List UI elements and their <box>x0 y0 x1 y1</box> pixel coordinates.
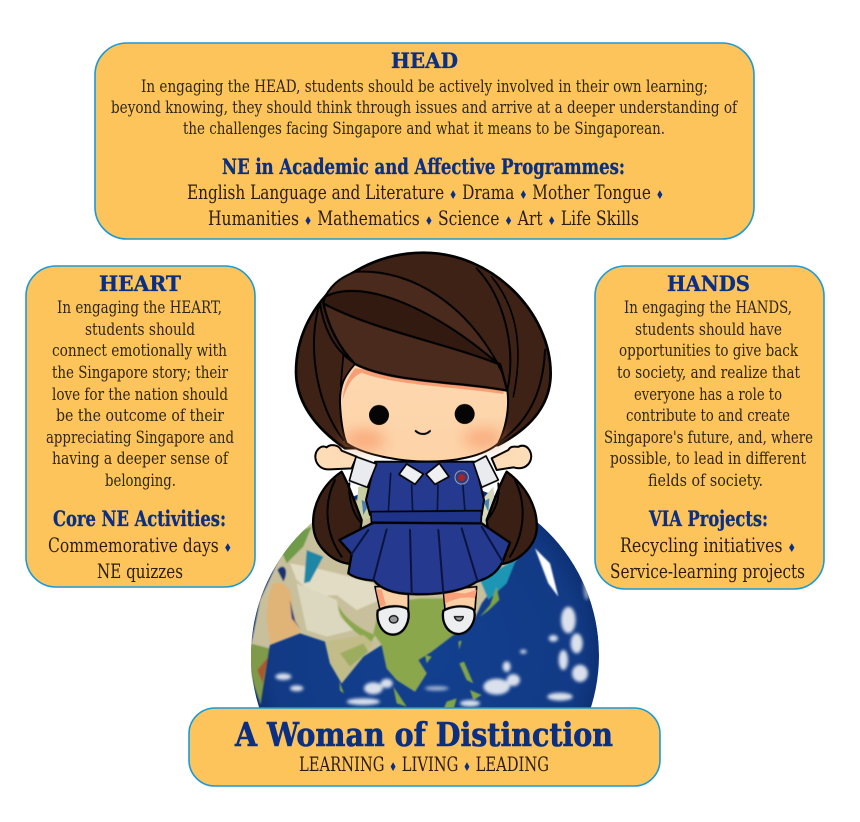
subheading: academic programmes: NE in Academic and Affective Programmes: <box>222 154 625 179</box>
arm right <box>492 446 531 470</box>
text block: hands description: everyone has a role to <box>634 385 782 404</box>
subtitle: LEARNING ♦ LIVING ♦ LEADING <box>299 752 549 776</box>
text block: hands description: students should have <box>635 320 782 339</box>
text block: heart description: having a deeper sense of <box>52 449 229 468</box>
text block: hands description: Singapore's future, and, where <box>604 428 813 447</box>
text block: heart description: love for the nation should <box>52 385 228 404</box>
panel: title banner <box>189 708 660 786</box>
subheading: core activities: Core NE Activities: <box>53 506 226 531</box>
pigtail left <box>313 472 362 564</box>
text block: programme list: Humanities ♦ Mathematics ♦ Science ♦ Art ♦ Life Skills <box>208 206 639 230</box>
heading: head: HEAD <box>391 48 458 73</box>
sleeves <box>349 456 498 487</box>
arm left <box>315 445 357 469</box>
clouds <box>275 548 590 707</box>
text block: head description: In engaging the HEAD, students should be actively involved in their own learning; <box>141 77 708 96</box>
text block: heart description: appreciating Singapore and <box>46 428 234 447</box>
text block: heart description: connect emotionally with <box>52 341 227 360</box>
text block: activities list <box>48 533 232 583</box>
illustration: earth globe <box>249 481 599 822</box>
text block: hands description: to society, and realize that <box>617 363 800 382</box>
land: asia <box>249 500 520 710</box>
title: A Woman of Distinction <box>234 715 613 754</box>
text block: activities list: NE quizzes <box>97 559 183 583</box>
text block: programme list <box>187 180 664 230</box>
hair <box>296 253 551 448</box>
text block: heart description: be the outcome of their <box>56 406 225 425</box>
heading: hands: HANDS <box>667 271 750 296</box>
text block: hands description <box>604 298 813 490</box>
text block: heart description: In engaging the HEART, <box>57 298 222 317</box>
text block: heart description: the Singapore story; their <box>52 363 229 382</box>
text block: programme list: English Language and Literature ♦ Drama ♦ Mother Tongue ♦ <box>187 180 664 204</box>
text block: hands description: fields of society. <box>648 471 763 490</box>
text block: head description: beyond knowing, they should think through issues and arrive at a deeper understanding of <box>111 98 738 117</box>
subheading: via projects: VIA Projects: <box>648 506 768 531</box>
eyes <box>369 404 475 425</box>
text block: hands description: opportunities to give back <box>619 341 799 360</box>
land: islands <box>480 587 499 617</box>
legs <box>375 587 477 610</box>
mouth <box>416 431 430 434</box>
panel: hands <box>595 266 824 589</box>
dress <box>366 462 484 525</box>
pigtail right <box>487 472 537 564</box>
text block: head description <box>111 77 738 138</box>
skirt <box>339 523 510 594</box>
collar <box>399 463 449 484</box>
text block: hands description: possible, to lead in different <box>610 449 806 468</box>
face <box>340 363 508 462</box>
illustration: schoolgirl character <box>296 253 551 635</box>
panel: head <box>95 43 754 239</box>
text block: heart description <box>46 298 234 490</box>
text block: projects list: Recycling initiatives ♦ <box>620 533 796 557</box>
fringe <box>323 271 507 391</box>
emblem <box>455 471 468 484</box>
text block: head description: the challenges facing Singapore and what it means to be Singaporean. <box>183 119 665 138</box>
text block: heart description: students should <box>85 320 195 339</box>
globe patches behind the girl <box>355 487 497 527</box>
text block: hands description: contribute to and create <box>626 406 790 425</box>
text block: projects list: Service-learning projects <box>610 559 805 583</box>
text block: hands description: In engaging the HANDS, <box>624 298 792 317</box>
panel: heart <box>26 266 255 587</box>
text block: projects list <box>610 533 805 583</box>
text block: activities list: Commemorative days ♦ <box>48 533 232 557</box>
shoes <box>377 606 475 635</box>
heading: heart: HEART <box>99 271 181 296</box>
text block: heart description: belonging. <box>105 471 176 490</box>
